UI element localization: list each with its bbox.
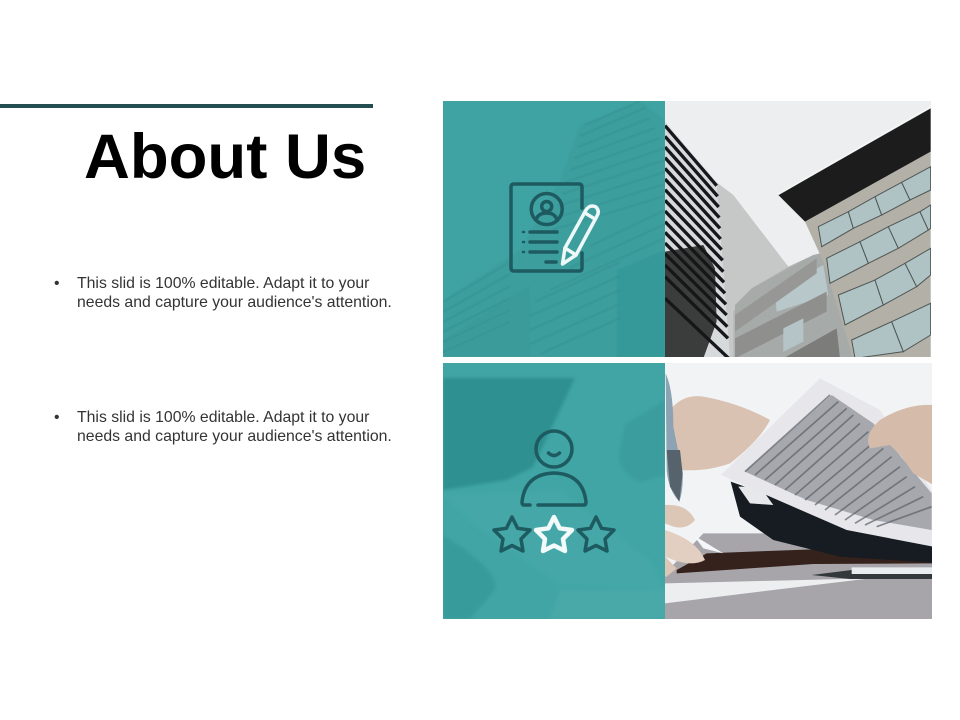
- icon: resume with pencil: [511, 184, 598, 271]
- photo: hands with document: [665, 363, 933, 620]
- icon: person with stars: [494, 431, 614, 551]
- accent rule: [0, 104, 373, 108]
- text block: first bullet: This slid is 100% editable. Adapt it to your: [77, 275, 369, 292]
- icon: middle star: [536, 517, 572, 551]
- panel: teal building tile: [443, 101, 665, 357]
- text block: second bullet: [54, 409, 392, 445]
- icon: right star: [578, 517, 614, 551]
- panel: teal document tile: [443, 363, 665, 619]
- title: About Us: [84, 122, 366, 192]
- text block: second bullet: needs and capture your audience's attention.: [77, 428, 392, 445]
- text block: first bullet: [54, 275, 392, 311]
- icon: left star: [494, 517, 530, 551]
- text block: first bullet: needs and capture your audience's attention.: [77, 294, 392, 311]
- image grid: [443, 101, 932, 619]
- text block: second bullet: This slid is 100% editable. Adapt it to your: [77, 409, 369, 426]
- text block: second bullet: •: [54, 409, 60, 426]
- photo: office building: [665, 101, 931, 358]
- text block: first bullet: •: [54, 275, 60, 292]
- icon: pencil: [562, 206, 598, 264]
